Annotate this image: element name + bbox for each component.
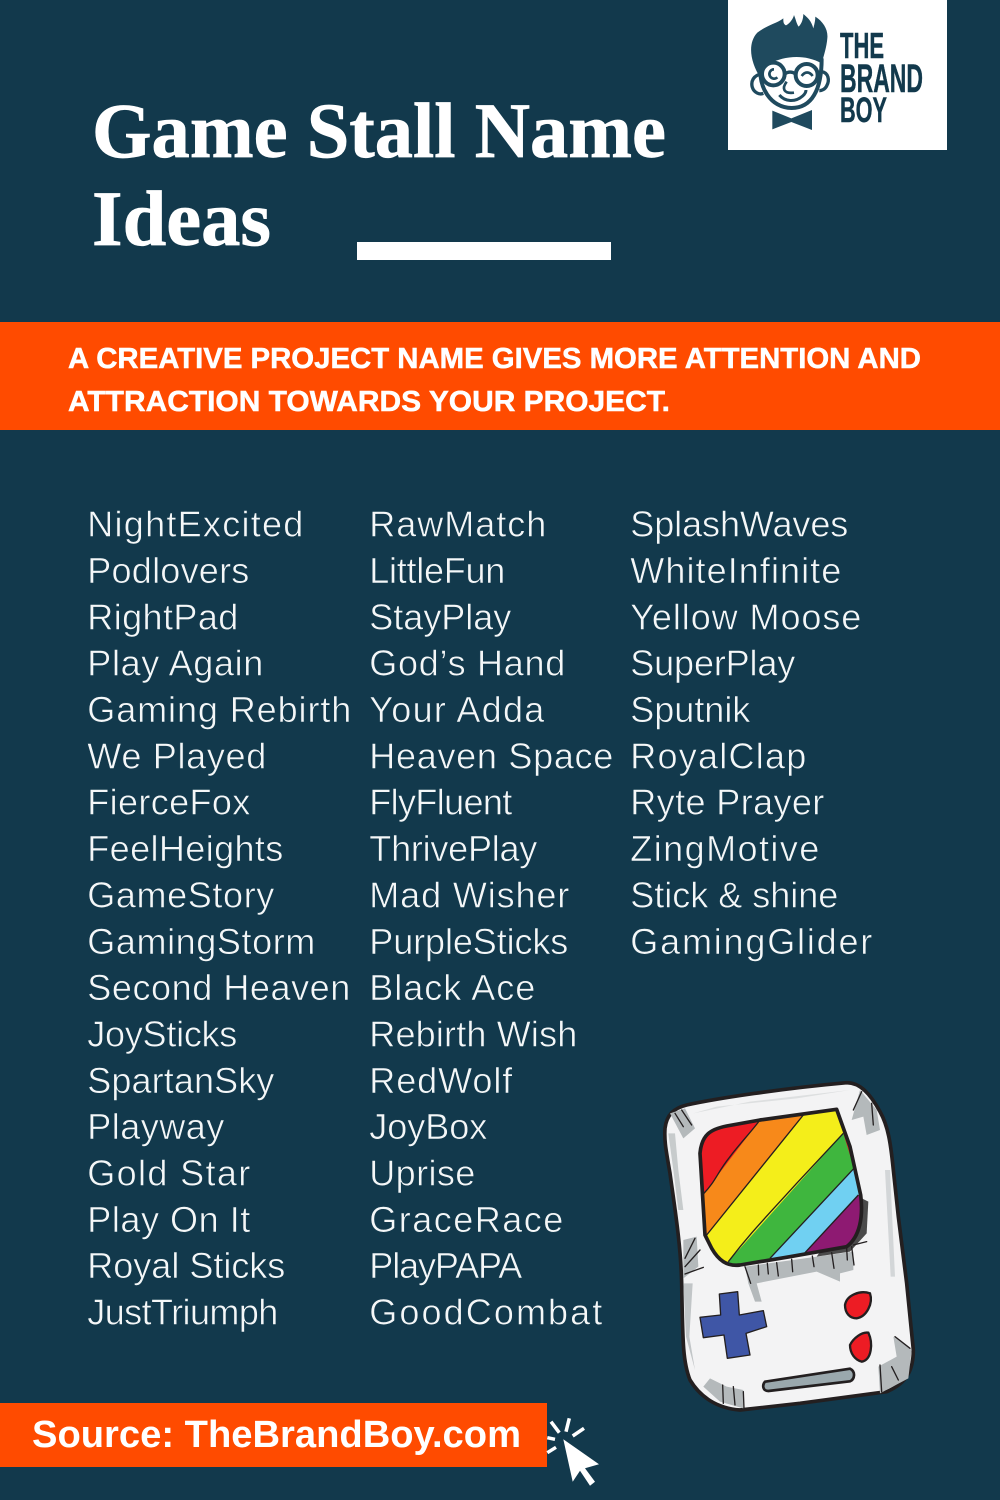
name list: column 2: Black Ace bbox=[369, 967, 535, 1008]
name list: column 2: God’s Hand bbox=[369, 643, 565, 684]
orange banner bbox=[0, 322, 1000, 430]
icon: handheld game console bbox=[665, 1083, 913, 1410]
icon: mouse cursor click bbox=[547, 1418, 599, 1486]
name list: column 3: Ryte Prayer bbox=[630, 782, 824, 823]
name list: column 3: ZingMotive bbox=[630, 828, 819, 869]
name list: column 3: RoyalClap bbox=[630, 735, 806, 776]
name list: column 3: SuperPlay bbox=[630, 643, 795, 684]
name list: column 1: RightPad bbox=[87, 596, 238, 637]
rainbow screen bbox=[702, 1111, 860, 1264]
source bar bbox=[0, 1403, 547, 1467]
logo wordmark: THE bbox=[840, 25, 884, 66]
logo wordmark: BRAND bbox=[840, 57, 923, 101]
logo wordmark bbox=[840, 25, 923, 130]
name list: column 3 bbox=[630, 504, 872, 962]
name list: column 2: Rebirth Wish bbox=[369, 1014, 577, 1055]
name list: column 1: FeelHeights bbox=[87, 828, 283, 869]
title underline bar bbox=[357, 242, 611, 260]
name list: column 2: RedWolf bbox=[369, 1060, 513, 1101]
logo: The Brand Boy bbox=[728, 0, 947, 150]
name list: column 2: PurpleSticks bbox=[369, 921, 568, 962]
name list: column 2: GoodCombat bbox=[369, 1292, 602, 1333]
name list: column 2: Heaven Space bbox=[369, 735, 613, 776]
name list: column 3: WhiteInfinite bbox=[630, 550, 841, 591]
name list: column 1: GameStory bbox=[87, 874, 274, 915]
name list: column 1: JoySticks bbox=[87, 1014, 237, 1055]
console body bbox=[665, 1083, 913, 1410]
name list: column 3: GamingGlider bbox=[630, 921, 872, 962]
name list: column 1: NightExcited bbox=[87, 504, 303, 545]
name list: column 2 bbox=[369, 504, 613, 1333]
name list: column 2: FlyFluent bbox=[369, 782, 512, 823]
name list: column 2: PlayPAPA bbox=[369, 1245, 522, 1286]
name list: column 1: GamingStorm bbox=[87, 921, 315, 962]
name list: column 2: LittleFun bbox=[369, 550, 505, 591]
speaker slot bbox=[763, 1369, 854, 1391]
name list: column 1: We Played bbox=[87, 735, 266, 776]
name list: column 2: ThrivePlay bbox=[369, 828, 537, 869]
name list: column 1: Gold Star bbox=[87, 1153, 250, 1194]
title: Game Stall Name bbox=[92, 87, 666, 174]
name list: column 1: Podlovers bbox=[87, 550, 249, 591]
screen backing shadow bbox=[817, 1197, 868, 1257]
source bar: Source: TheBrandBoy.com bbox=[32, 1414, 521, 1456]
name list: column 1: SpartanSky bbox=[87, 1060, 274, 1101]
name list: column 1: Play On It bbox=[87, 1199, 250, 1240]
icon: boy mascot bbox=[751, 14, 828, 130]
name list: column 2: GraceRace bbox=[369, 1199, 563, 1240]
logo wordmark: BOY bbox=[840, 91, 887, 130]
orange banner: A CREATIVE PROJECT NAME GIVES MORE ATTENTION AND bbox=[68, 343, 921, 375]
name list: column 1: Play Again bbox=[87, 643, 263, 684]
name list: column 1: Second Heaven bbox=[87, 967, 350, 1008]
name list: column 2: JoyBox bbox=[369, 1106, 487, 1147]
name list: column 3: Yellow Moose bbox=[630, 596, 861, 637]
name list: column 1: Gaming Rebirth bbox=[87, 689, 351, 730]
name list: column 1 bbox=[87, 504, 351, 1333]
name list: column 3: SplashWaves bbox=[630, 504, 848, 545]
name list: column 2: RawMatch bbox=[369, 504, 546, 545]
screen and corner scratch marks bbox=[675, 1092, 910, 1408]
title: Ideas bbox=[92, 175, 271, 262]
orange banner: ATTRACTION TOWARDS YOUR PROJECT. bbox=[68, 386, 670, 418]
name list: column 1: Royal Sticks bbox=[87, 1245, 285, 1286]
red buttons bbox=[845, 1292, 871, 1362]
name list: column 1: Playway bbox=[87, 1106, 224, 1147]
d-pad bbox=[700, 1292, 767, 1358]
title bbox=[92, 87, 666, 262]
name list: column 3: Stick & shine bbox=[630, 874, 838, 915]
name list: column 2: StayPlay bbox=[369, 596, 511, 637]
screen outline bbox=[700, 1109, 862, 1265]
console shading bbox=[668, 1090, 912, 1408]
name list: column 1: JustTriumph bbox=[87, 1292, 278, 1333]
name list: column 2: Uprise bbox=[369, 1153, 475, 1194]
name list: column 3: Sputnik bbox=[630, 689, 751, 730]
name list: column 2: Your Adda bbox=[369, 689, 545, 730]
name list: column 2: Mad Wisher bbox=[369, 874, 569, 915]
name list: column 1: FierceFox bbox=[87, 782, 250, 823]
